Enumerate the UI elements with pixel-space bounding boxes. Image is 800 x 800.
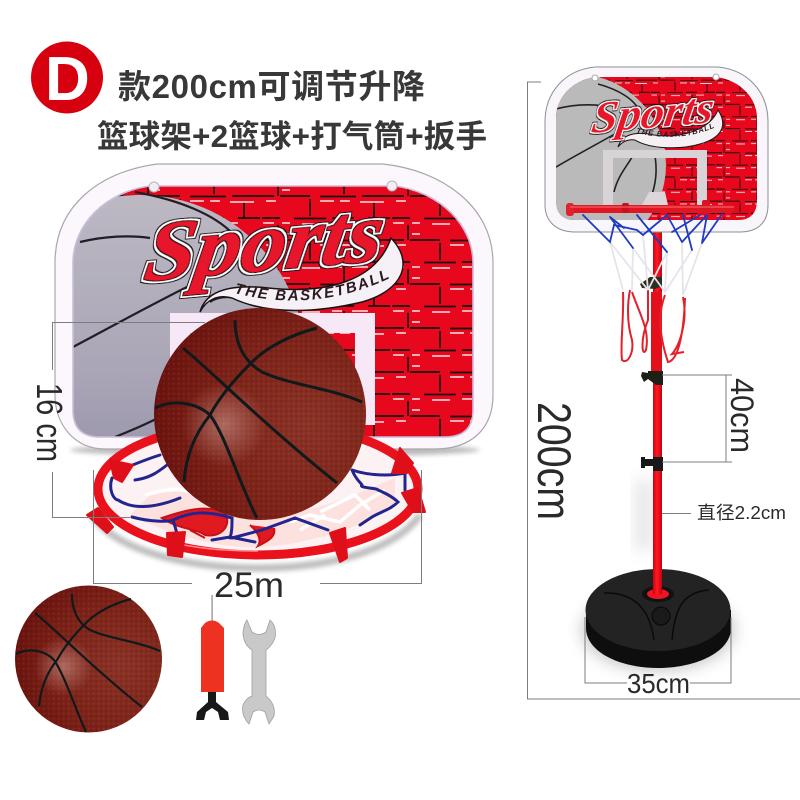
- white net strands: [145, 489, 385, 530]
- upper clamp: [641, 371, 663, 385]
- small rim: [566, 200, 734, 216]
- small net: red: [621, 290, 685, 362]
- backboard shell: [55, 164, 493, 449]
- rim mount: [642, 192, 668, 205]
- backboard shadow: [70, 443, 480, 457]
- rim ring: [98, 423, 418, 555]
- pole sleeve: [651, 292, 662, 372]
- small logo swoosh: [618, 110, 723, 148]
- basketball: large: [154, 308, 366, 520]
- panel: full stand: [544, 66, 768, 678]
- title: line two: 篮球架+2篮球+打气筒+扳手: [97, 118, 487, 154]
- red lower net: [162, 509, 274, 546]
- weighted base: [586, 569, 731, 668]
- net clamp: [640, 277, 662, 289]
- small backboard: [544, 66, 768, 232]
- panel: large backboard: [54, 163, 494, 458]
- dimension: adjustment 40cm: 40cm: [724, 378, 760, 453]
- blue net strands: [111, 455, 405, 542]
- logo: Sports: Sports: [139, 185, 391, 300]
- hoop: large view: [87, 423, 425, 568]
- base shadow: [582, 590, 734, 670]
- pole: [653, 225, 662, 594]
- net interior: [101, 426, 415, 552]
- icon: wrench: [243, 620, 275, 724]
- lower clamp: [641, 457, 663, 471]
- small logo: Sports: Sports: [588, 82, 718, 143]
- small net: blue: [583, 214, 722, 252]
- dimension: rim width 25m: 25m: [214, 566, 284, 605]
- pole shadow: [637, 480, 651, 550]
- dimension: base 35cm: 35cm: [627, 668, 690, 699]
- pump needle: [211, 595, 213, 622]
- mounting holes: [149, 181, 397, 192]
- badge: letter D: D: [45, 45, 90, 114]
- rim shadow: [92, 515, 420, 568]
- dimension: overall height 200cm: [528, 82, 800, 699]
- dimension: overall height 200cm: 200cm: [528, 402, 581, 520]
- rim brackets: [87, 448, 425, 562]
- dimension: backboard height 16cm: 16 cm: [29, 383, 70, 462]
- title: line one: 款200cm可调节升降: [118, 68, 425, 105]
- badge: letter D: [31, 42, 103, 114]
- pump body: [201, 620, 224, 692]
- basketball: small: [15, 586, 162, 732]
- pump handle: [196, 692, 229, 720]
- backboard printed artwork: [74, 186, 472, 436]
- logo: THE BASKETBALL: THE BASKETBALL: [236, 270, 389, 300]
- small net: white: [610, 235, 702, 295]
- dimension: rim width 25m: [94, 470, 422, 605]
- dimension: backboard height 16cm: [29, 322, 205, 518]
- dimension: pole diameter: [662, 503, 786, 523]
- dimension: base 35cm: [585, 617, 731, 699]
- icon: air pump: [196, 595, 229, 720]
- dimension: pole diameter: 直径2.2cm: [697, 503, 786, 523]
- dimension: adjustment 40cm: [662, 375, 760, 462]
- logo swoosh: [200, 238, 403, 312]
- small logo: THE BASKETBALL: THE BASKETBALL: [638, 124, 714, 137]
